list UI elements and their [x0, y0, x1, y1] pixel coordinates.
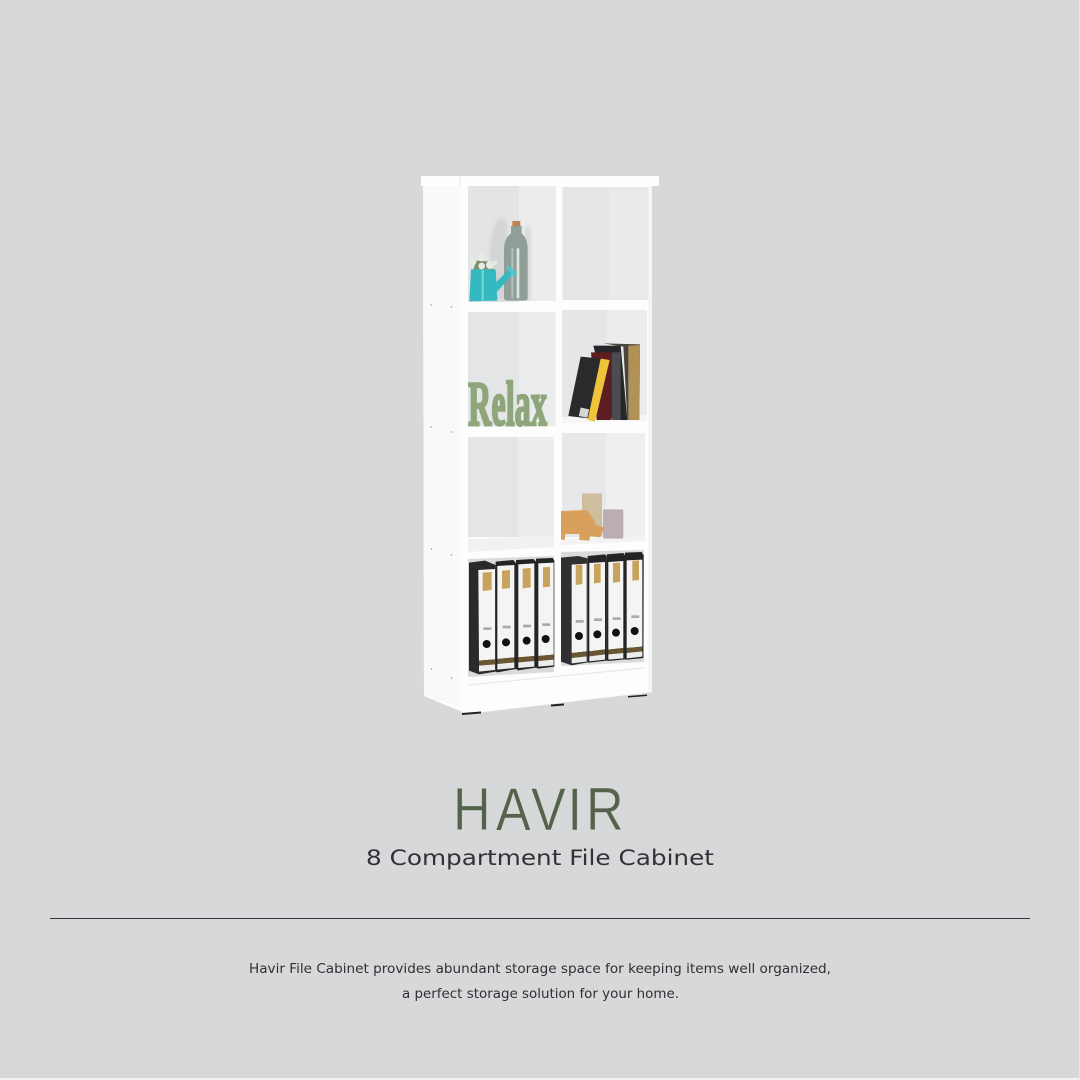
bottle	[504, 221, 528, 301]
binders: right group	[561, 552, 644, 665]
flowers	[469, 253, 498, 269]
shadow right of bottle	[525, 227, 531, 300]
watering can	[469, 264, 518, 301]
decor: Relax sign: Relax	[468, 368, 547, 439]
short candle	[603, 509, 623, 539]
binder 2	[496, 560, 516, 672]
cabinet feet	[462, 694, 647, 715]
compartment row 1	[468, 186, 648, 302]
binder 4	[536, 558, 554, 669]
binder 3	[516, 559, 536, 670]
description text: Havir File Cabinet provides abundant storage space for keeping items well organized,	[249, 961, 831, 977]
binder 5	[561, 556, 588, 665]
binder 8	[625, 552, 644, 660]
description text: a perfect storage solution for your home.	[402, 986, 679, 1002]
divider line	[50, 918, 1030, 920]
cabinet body	[421, 176, 659, 714]
binder 6	[588, 554, 607, 663]
description text	[249, 961, 831, 1002]
binders: left group	[469, 558, 554, 674]
title: HAVIR	[453, 776, 624, 843]
bottle shadow	[490, 217, 507, 300]
compartment row 4	[468, 550, 644, 685]
compartment row 3	[468, 433, 645, 552]
cabinet screws	[430, 304, 452, 679]
binder 1	[469, 561, 496, 674]
compartment row 2	[468, 310, 647, 426]
decor: candles and wooden rhino	[561, 493, 623, 541]
product: white file cabinet	[421, 176, 659, 715]
binder 7	[607, 553, 625, 661]
wooden rhino	[561, 510, 605, 541]
decor: books	[568, 343, 640, 422]
tall candle	[582, 493, 602, 537]
decor: bottle and watering can	[469, 217, 531, 301]
subtitle: 8 Compartment File Cabinet	[366, 846, 714, 870]
